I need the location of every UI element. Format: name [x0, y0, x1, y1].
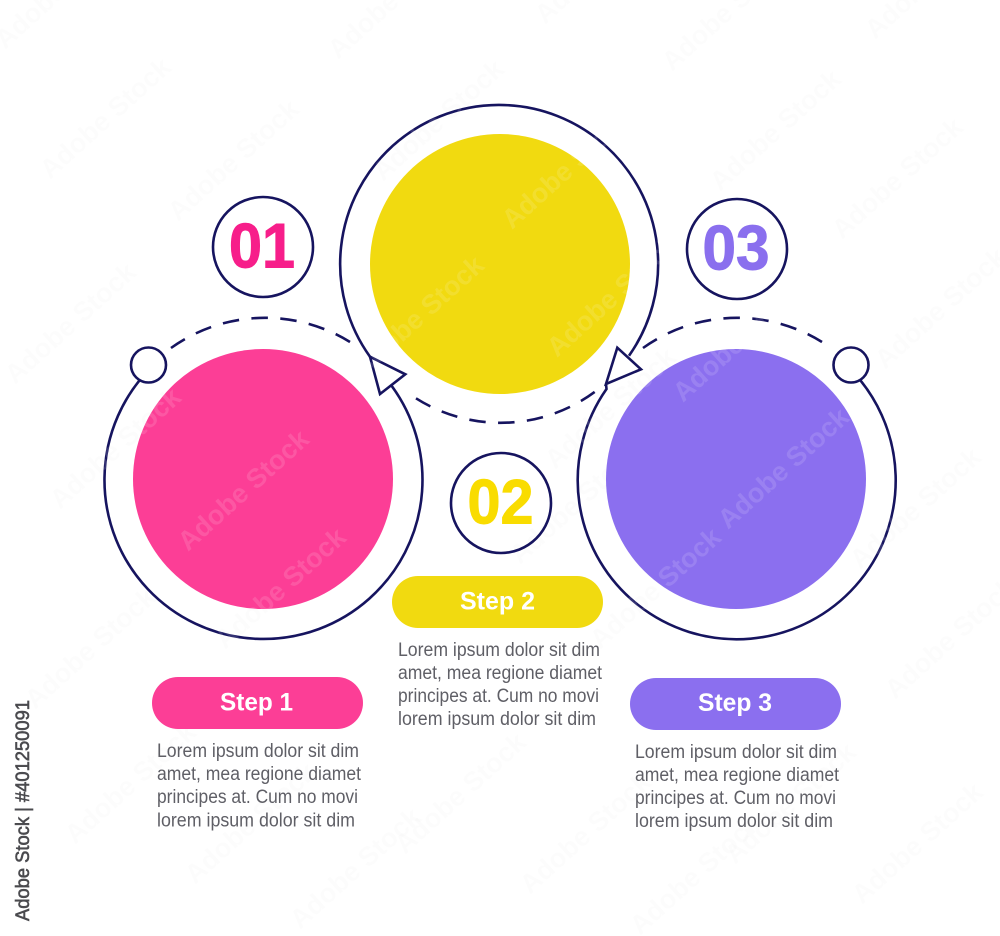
- step 1 text block: [157, 741, 362, 832]
- faint watermarks on white: Adobe Stock: [19, 581, 162, 714]
- step 2 outer ring: [340, 105, 658, 357]
- yellow filled circle: [370, 134, 630, 394]
- step 3 number badge: [687, 199, 787, 299]
- faint watermarks on white: Adobe Stock: [844, 441, 987, 574]
- step 3 text block: amet, mea regione diamet: [635, 765, 840, 786]
- panel: step 3: [578, 199, 896, 832]
- purple filled circle: [606, 349, 866, 609]
- faint watermarks on white: Adobe Stock: [44, 381, 187, 514]
- step 1 dashed arc: [171, 318, 350, 348]
- step 2 text block: principes at. Cum no movi: [398, 686, 599, 707]
- step 1 pill: [152, 677, 363, 729]
- step 3 dashed arc: [643, 318, 822, 348]
- step 2 text block: Lorem ipsum dolor sit dim: [398, 640, 600, 661]
- watermarks over coloured shapes: Adobe Stock: [667, 274, 810, 407]
- watermarks over coloured shapes: Adobe Stock: [209, 521, 352, 654]
- watermarks over coloured shapes: Adobe Stock: [712, 401, 855, 534]
- watermarks over coloured shapes: Adobe Stock: [584, 521, 727, 654]
- step 3 pill: Step 3: [698, 689, 772, 717]
- faint watermarks on white: Adobe Stock: [284, 801, 427, 934]
- faint watermarks on white: Adobe Stock: [846, 776, 989, 909]
- watermarks over coloured shapes: Adobe Stock: [367, 53, 510, 186]
- faint watermarks on white: Adobe Stock: [539, 341, 682, 474]
- panel: step 2: [340, 105, 658, 730]
- step 1 text block: principes at. Cum no movi: [157, 787, 358, 808]
- panel: step 1: [104, 197, 422, 832]
- faint watermarks on white: Adobe Stock: [209, 521, 352, 654]
- step 2 text block: amet, mea regione diamet: [398, 663, 603, 684]
- step 1 text block: amet, mea regione diamet: [157, 764, 362, 785]
- step 3 text block: Lorem ipsum dolor sit dim: [635, 742, 837, 763]
- step 3 text block: principes at. Cum no movi: [635, 788, 836, 809]
- faint watermarks on white: Adobe Stock: [584, 521, 727, 654]
- step 1 text block: lorem ipsum dolor sit dim: [157, 810, 355, 832]
- faint watermarks on white: Adobe Stock: [367, 53, 510, 186]
- step 3 pill: [630, 678, 841, 730]
- step 2 text block: lorem ipsum dolor sit dim: [398, 709, 596, 730]
- arrowhead into step 2: [370, 357, 405, 394]
- faint watermarks on white: Adobe Stock: [0, 256, 142, 389]
- step 1 outer ring: [104, 368, 422, 639]
- watermarks over coloured shapes: Adobe Stock: [347, 249, 490, 382]
- faint watermarks on white: Adobe Stock: [704, 63, 847, 196]
- watermarks over coloured shapes: Adobe Stock: [541, 229, 684, 362]
- faint watermarks on white: Adobe Stock: [826, 111, 969, 244]
- faint watermarks on white: Adobe Stock: [34, 51, 177, 184]
- faint watermarks on white: Adobe Stock: [162, 93, 305, 226]
- watermarks over coloured shapes: [44, 53, 987, 654]
- faint watermarks on white: Adobe Stock: [59, 716, 202, 849]
- step 1 pill: Step 1: [220, 688, 293, 716]
- step 3 outer ring: [578, 368, 896, 639]
- watermarks over coloured shapes: Adobe Stock: [496, 101, 639, 234]
- faint watermarks on white: Adobe Stock: [719, 736, 862, 869]
- watermarks over coloured shapes: Adobe Stock: [539, 341, 682, 474]
- arrowhead into step 3: [606, 348, 641, 384]
- step 2 pill: [392, 576, 603, 628]
- step 1 text block: Lorem ipsum dolor sit dim: [157, 741, 359, 762]
- step 2 pill: Step 2: [460, 588, 535, 616]
- step 1 number badge: [213, 197, 313, 297]
- watermarks over coloured shapes: Adobe Stock: [844, 441, 987, 574]
- faint watermarks on white: Adobe Stock: [179, 756, 322, 889]
- step 2 dashed arc: [416, 392, 595, 423]
- faint watermarks on white: Adobe Stock: [389, 726, 532, 859]
- faint watermarks on white: Adobe Stock: [514, 766, 657, 899]
- step 1 start node: [131, 348, 166, 382]
- watermarks over coloured shapes: Adobe Stock: [172, 423, 315, 556]
- step 3 number badge: 03: [702, 214, 770, 284]
- step 2 number badge: 02: [468, 468, 534, 538]
- watermarks over coloured shapes: Adobe Stock: [44, 381, 187, 514]
- pink filled circle: [133, 349, 393, 609]
- step 3 end node: [834, 348, 868, 382]
- step 3 text block: [635, 742, 840, 832]
- step 3 text block: lorem ipsum dolor sit dim: [635, 811, 833, 832]
- step 2 number badge: [451, 453, 551, 553]
- step 2 text block: [398, 640, 603, 730]
- step 1 number badge: 01: [229, 212, 295, 282]
- stock id credit: Adobe Stock | #401250091: [13, 700, 34, 921]
- faint watermarks on white: Adobe Stock: [504, 436, 647, 569]
